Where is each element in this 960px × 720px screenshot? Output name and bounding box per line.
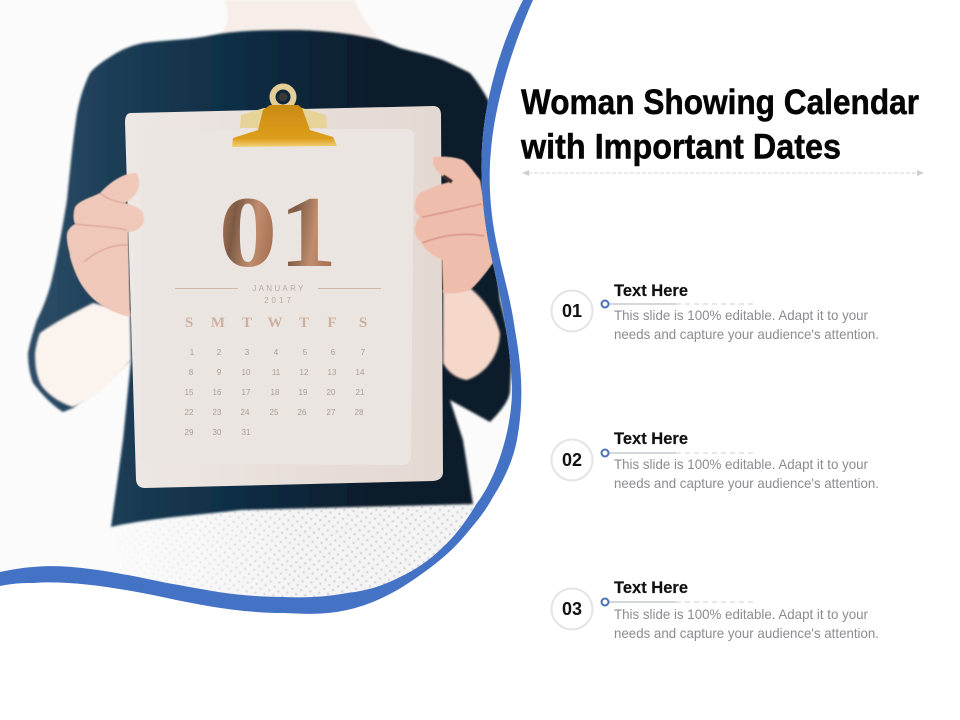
body 03: needs and capture your audience's attention.	[614, 625, 879, 641]
month label	[175, 285, 381, 303]
body 03	[614, 606, 879, 641]
calendar dates: 11	[272, 368, 281, 377]
calendar dates: 15	[185, 388, 194, 397]
body 02	[614, 456, 879, 491]
calendar dates: 19	[299, 388, 308, 397]
calendar dates: 14	[356, 368, 365, 377]
item 03	[552, 578, 879, 641]
calendar dates: 4	[274, 348, 279, 357]
badge 01	[552, 290, 592, 332]
weekday headers	[186, 318, 366, 327]
weekday headers: W	[268, 315, 282, 331]
body 01: needs and capture your audience's attention.	[614, 326, 879, 342]
calendar dates: 1	[190, 348, 195, 357]
calendar dates: 6	[331, 348, 336, 357]
navy sweater	[28, 30, 512, 527]
calendar dates: 20	[327, 388, 336, 397]
month label: 2017	[264, 296, 294, 305]
calendar dates: 13	[328, 368, 337, 377]
month label: JANUARY	[252, 284, 306, 293]
title: Woman Showing Calendar	[521, 83, 919, 122]
calendar dates: 28	[355, 408, 364, 417]
left forearm	[35, 303, 131, 407]
calendar dates: 26	[298, 408, 307, 417]
heading 03: Text Here	[614, 578, 688, 597]
left hand	[67, 173, 144, 317]
badge 03	[552, 588, 592, 630]
calendar dates: 12	[300, 368, 309, 377]
body 01: This slide is 100% editable. Adapt it to your	[614, 307, 868, 323]
calendar dates: 25	[270, 408, 279, 417]
big date number	[223, 198, 332, 267]
calendar dates: 31	[242, 428, 251, 437]
badge 03: 03	[562, 599, 582, 619]
title: with Important Dates	[520, 128, 841, 166]
big date number: 1	[279, 175, 337, 288]
heading 01: Text Here	[614, 281, 688, 300]
heading 02: Text Here	[614, 429, 688, 448]
connector 02	[602, 450, 756, 456]
weekday headers: T	[299, 315, 309, 331]
weekday headers: T	[242, 315, 252, 331]
right hand	[415, 157, 495, 293]
calendar dates: 8	[189, 368, 194, 377]
dotted skirt	[137, 504, 476, 598]
calendar paper	[306, 129, 414, 465]
calendar dates: 3	[245, 348, 250, 357]
weekday headers: F	[327, 315, 337, 331]
calendar dates: 24	[241, 408, 250, 417]
title	[520, 83, 919, 166]
woman's neck	[222, 0, 380, 40]
badge 01: 01	[562, 301, 582, 321]
calendar dates: 9	[217, 368, 222, 377]
connector 03	[602, 598, 756, 606]
calendar dates: 7	[361, 348, 366, 357]
gold clip	[232, 86, 337, 147]
badge 02	[552, 440, 592, 480]
connector 01	[602, 300, 756, 308]
clipboard board	[125, 106, 443, 488]
calendar dates: 5	[303, 348, 308, 357]
calendar dates: 22	[185, 408, 194, 417]
right forearm	[443, 288, 500, 380]
weekday headers: S	[185, 315, 193, 331]
big date number: 0	[219, 175, 277, 288]
calendar dates: 23	[213, 408, 222, 417]
title divider arrow	[522, 170, 924, 176]
calendar dates: 21	[356, 388, 365, 397]
badge 02: 02	[562, 450, 582, 470]
weekday headers: M	[211, 315, 225, 331]
item 02	[552, 429, 879, 491]
calendar dates: 16	[213, 388, 222, 397]
calendar dates: 18	[271, 388, 280, 397]
calendar dates: 29	[185, 428, 194, 437]
body 03: This slide is 100% editable. Adapt it to your	[614, 606, 868, 622]
calendar dates: 27	[327, 408, 336, 417]
calendar dates: 30	[213, 428, 222, 437]
item 01	[552, 281, 879, 342]
blue wave border	[0, 0, 533, 614]
calendar dates: 17	[242, 388, 251, 397]
calendar dates: 10	[242, 368, 251, 377]
body 01	[614, 307, 879, 342]
body 02: needs and capture your audience's attention.	[614, 475, 879, 491]
calendar dates: 2	[217, 348, 222, 357]
photo: woman holding calendar	[26, 0, 512, 598]
calendar dates	[185, 348, 366, 437]
body 02: This slide is 100% editable. Adapt it to your	[614, 456, 868, 472]
weekday headers: S	[359, 315, 367, 331]
